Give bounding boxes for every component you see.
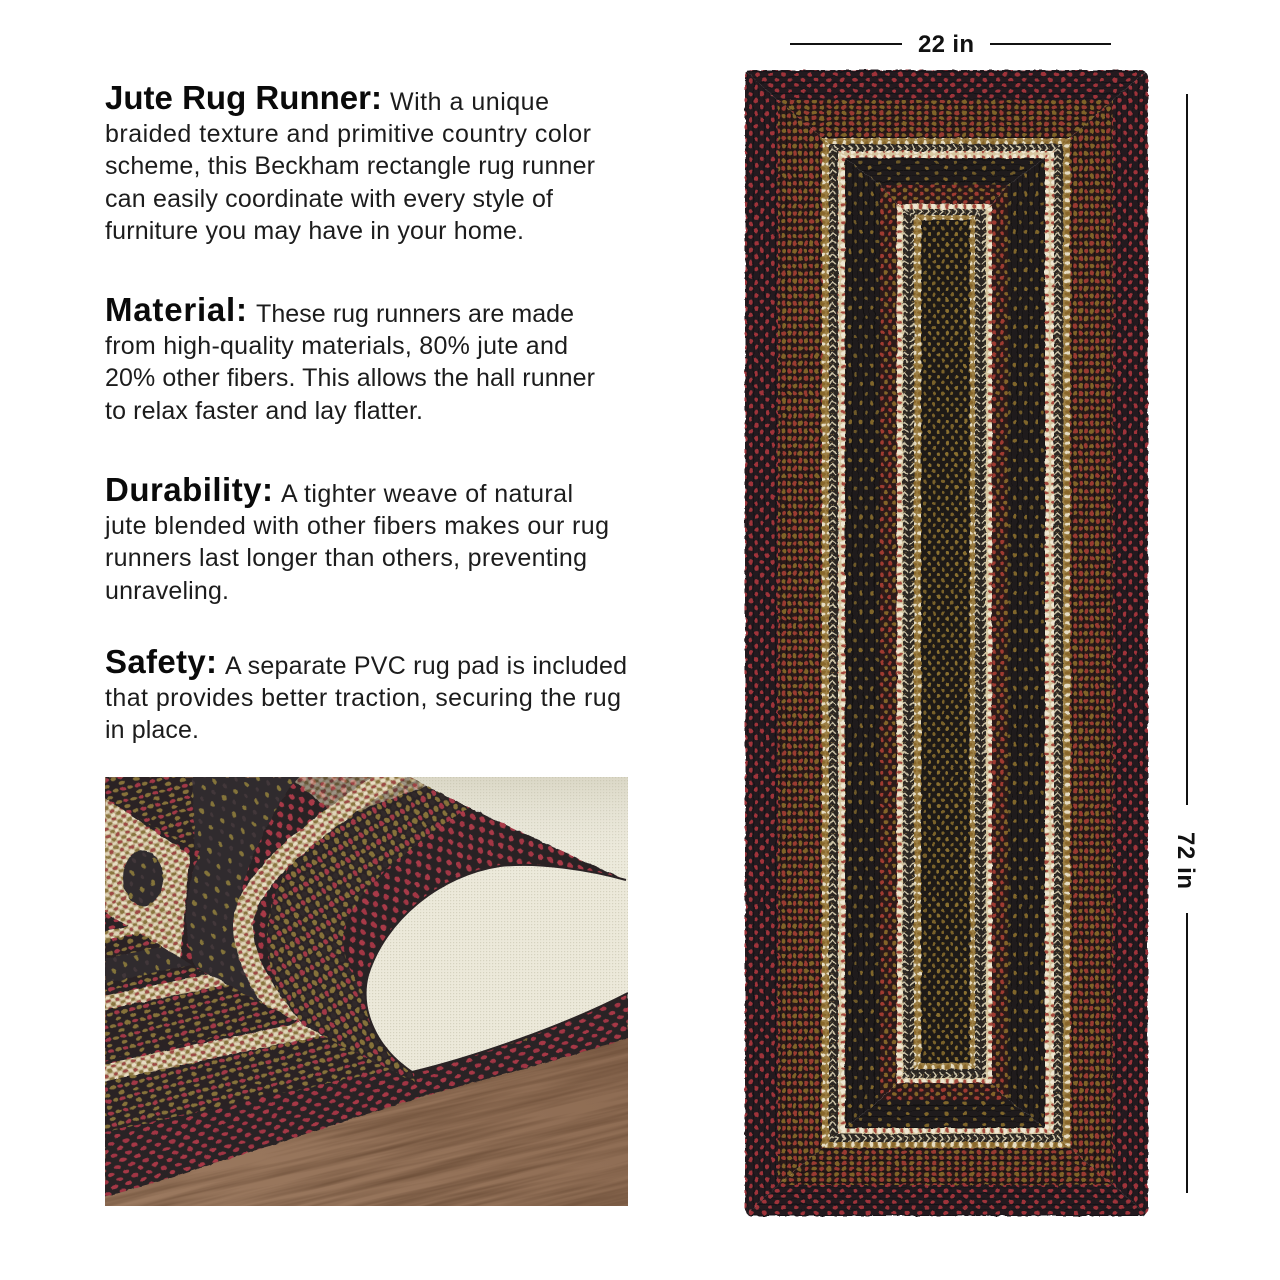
PVC rug pad [366,777,628,1071]
text block: Jute Rug Runner [105,79,595,245]
text block: Durability: unraveling. [105,577,229,605]
rolled rug layer [105,777,621,1082]
text block: Durability [104,471,609,605]
text block: Safety: that provides better traction, securing the rug [105,684,621,712]
band: outer dark red [745,70,1148,1216]
text block: Safety: in place. [105,716,199,744]
text block: Material: Material: [105,291,247,328]
roll edge line [366,865,628,1072]
band: dark with gold flecks [845,158,1045,1128]
text block: Material: 20% other fibers. This allows the hall runner [105,364,595,392]
braided rug runner [745,70,1148,1216]
text block: Durability: runners last longer than others, preventing [105,544,587,572]
band: inner light stripe [897,204,992,1083]
text block: Jute Rug Runner: scheme, this Beckham rectangle rug runner [105,152,595,180]
text block: Jute Rug Runner: furniture you may have in your home. [105,217,524,245]
text block: Jute Rug Runner: can easily coordinate with every style of [105,185,553,213]
text block: Material: from high-quality materials, 80% jute and [105,332,568,360]
band: center panel [921,220,970,1063]
text block: Material: to relax faster and lay flatter. [105,397,423,425]
text block: Material [105,291,595,425]
text block: Jute Rug Runner: braided texture and primitive country color [105,120,591,148]
text block: Durability: A tighter weave of natural [281,480,573,508]
text block: Durability: Durability: [105,471,273,508]
band: brown gold red [778,100,1113,1185]
text block: Durability: jute blended with other fibers makes our rug [104,512,609,540]
text block: Jute Rug Runner: Jute Rug Runner: [105,79,382,116]
band: outer light stripe [822,138,1070,1148]
dimension: length 72 in: 72 in [1172,832,1199,889]
lower rug layer [105,912,628,1196]
text block: Material: These rug runners are made [256,300,574,328]
wood floor [105,777,628,1206]
text block: Jute Rug Runner: With a unique [390,88,549,116]
photo: rolled rug corner showing PVC pad [105,777,628,1206]
dimension: width 22 in: 22 in [918,31,974,58]
band: inner red brown [880,185,1008,1100]
text block: Safety: A separate PVC rug pad is included [225,652,627,680]
text block: Safety [105,643,627,744]
text block: Safety: Safety: [105,643,217,680]
